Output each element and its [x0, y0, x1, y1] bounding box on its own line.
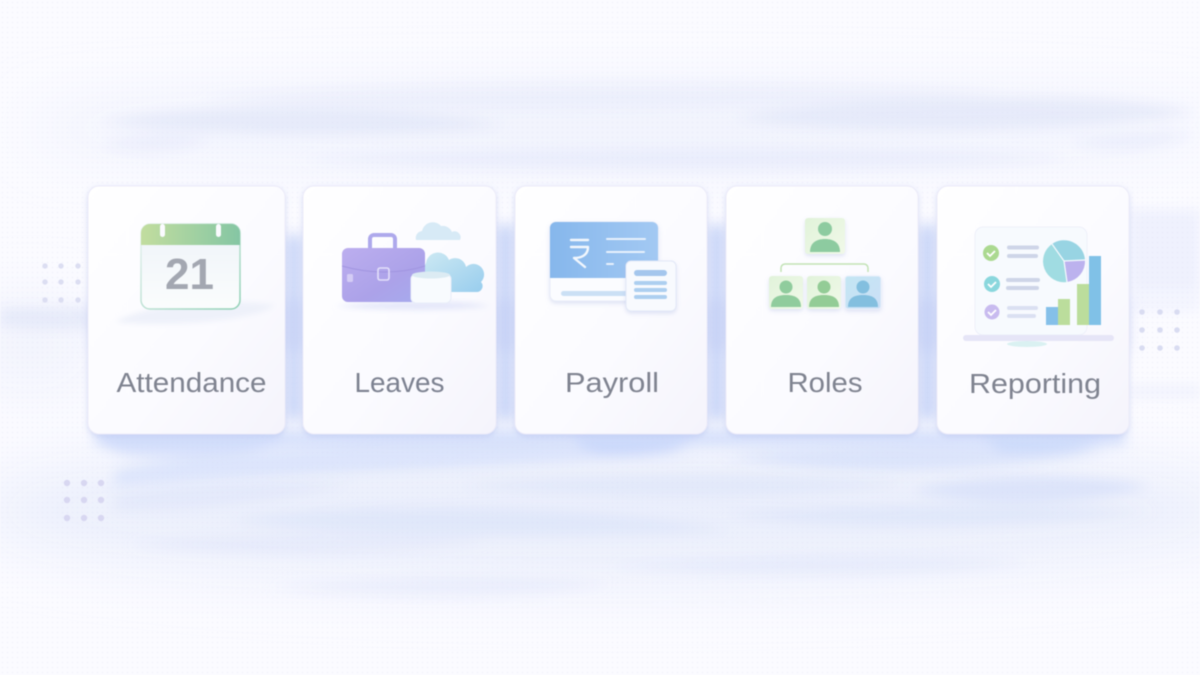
pie chart [1043, 240, 1085, 282]
top person [805, 218, 845, 254]
label: payroll: Payroll [565, 367, 659, 398]
dot cluster: right [1139, 309, 1180, 351]
dot cluster: upper left [42, 263, 81, 303]
blue glow behind cards [90, 225, 1130, 420]
person right [845, 276, 881, 309]
panel: roles card [726, 186, 918, 434]
icon: org chart [750, 218, 885, 312]
dot cluster: lower left [64, 480, 104, 521]
panel: payroll card [515, 186, 707, 434]
icon: report dashboard [963, 227, 1114, 347]
rupee symbol [571, 240, 588, 267]
icon: calendar [115, 224, 275, 324]
icon: payslip with rupee [550, 222, 690, 311]
date number: 21 [165, 250, 214, 299]
label: roles: Roles [788, 367, 862, 398]
person middle [807, 276, 841, 309]
bar chart [1046, 256, 1101, 325]
panel: attendance card [88, 186, 285, 434]
person left [769, 276, 803, 309]
label: reporting: Reporting [969, 368, 1101, 399]
panel: leaves card [303, 186, 496, 434]
label: leaves: Leaves [354, 367, 444, 398]
panel: reporting card [937, 186, 1129, 434]
label: attendance: Attendance [116, 367, 266, 398]
icon: briefcase with clouds [335, 222, 490, 310]
